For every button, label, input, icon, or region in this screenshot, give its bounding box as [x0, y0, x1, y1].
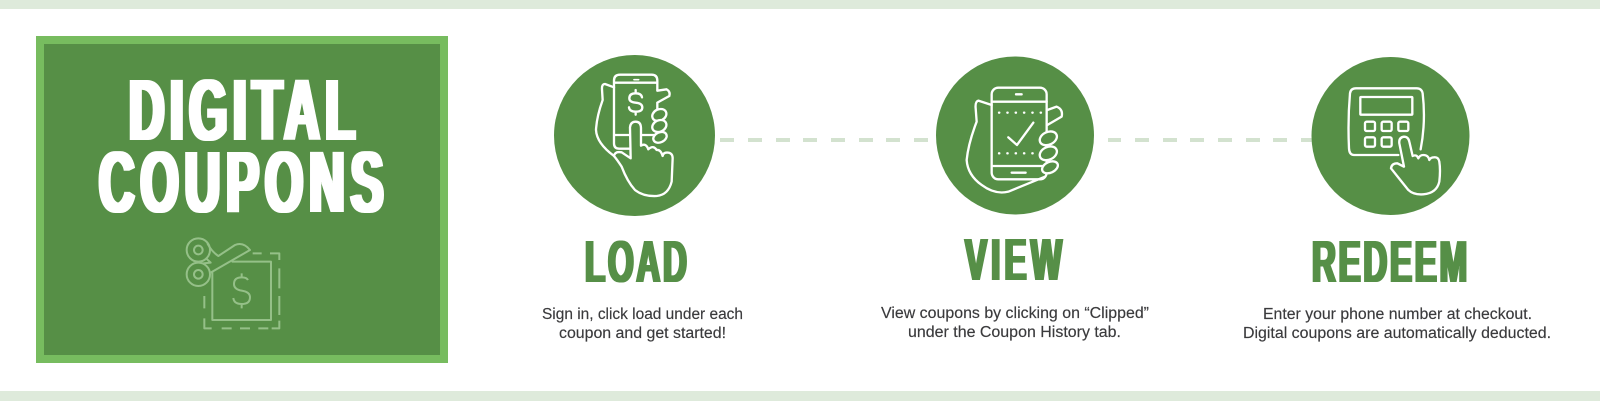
- icon: hand holding phone with check mark: [936, 56, 1094, 214]
- dashed connector: load to view: [720, 138, 928, 142]
- text: view description: under the Coupon History tab.: [908, 324, 1121, 341]
- text: load description: [542, 306, 743, 342]
- panel: digital coupons title box: [40, 40, 444, 359]
- text: view description: [881, 305, 1149, 341]
- text: redeem description: Digital coupons are automatically deducted.: [1243, 325, 1551, 342]
- icon: scissors cutting coupon: [187, 238, 279, 328]
- panel: view step: [881, 56, 1149, 341]
- panel: load step: [542, 55, 743, 342]
- title: COUPONS: [99, 134, 383, 232]
- icon: finger pressing keypad: [1312, 57, 1470, 215]
- title: [99, 62, 383, 232]
- icon: hand tapping phone with dollar sign: [554, 55, 715, 216]
- heading: view: VIEW: [965, 228, 1062, 294]
- bottom band: [0, 391, 1600, 401]
- heading: redeem: REDEEM: [1312, 230, 1467, 296]
- title: DIGITAL: [129, 62, 355, 160]
- top band: [0, 0, 1600, 9]
- text: view description: View coupons by clicking on “Clipped”: [881, 305, 1149, 322]
- text: load description: coupon and get started!: [559, 325, 726, 342]
- heading: load: LOAD: [585, 230, 687, 296]
- text: redeem description: [1243, 306, 1551, 342]
- text: redeem description: Enter your phone number at checkout.: [1263, 306, 1532, 323]
- dashed connector: view to redeem: [1108, 138, 1313, 142]
- panel: redeem step: [1243, 57, 1551, 342]
- text: load description: Sign in, click load under each: [542, 306, 743, 323]
